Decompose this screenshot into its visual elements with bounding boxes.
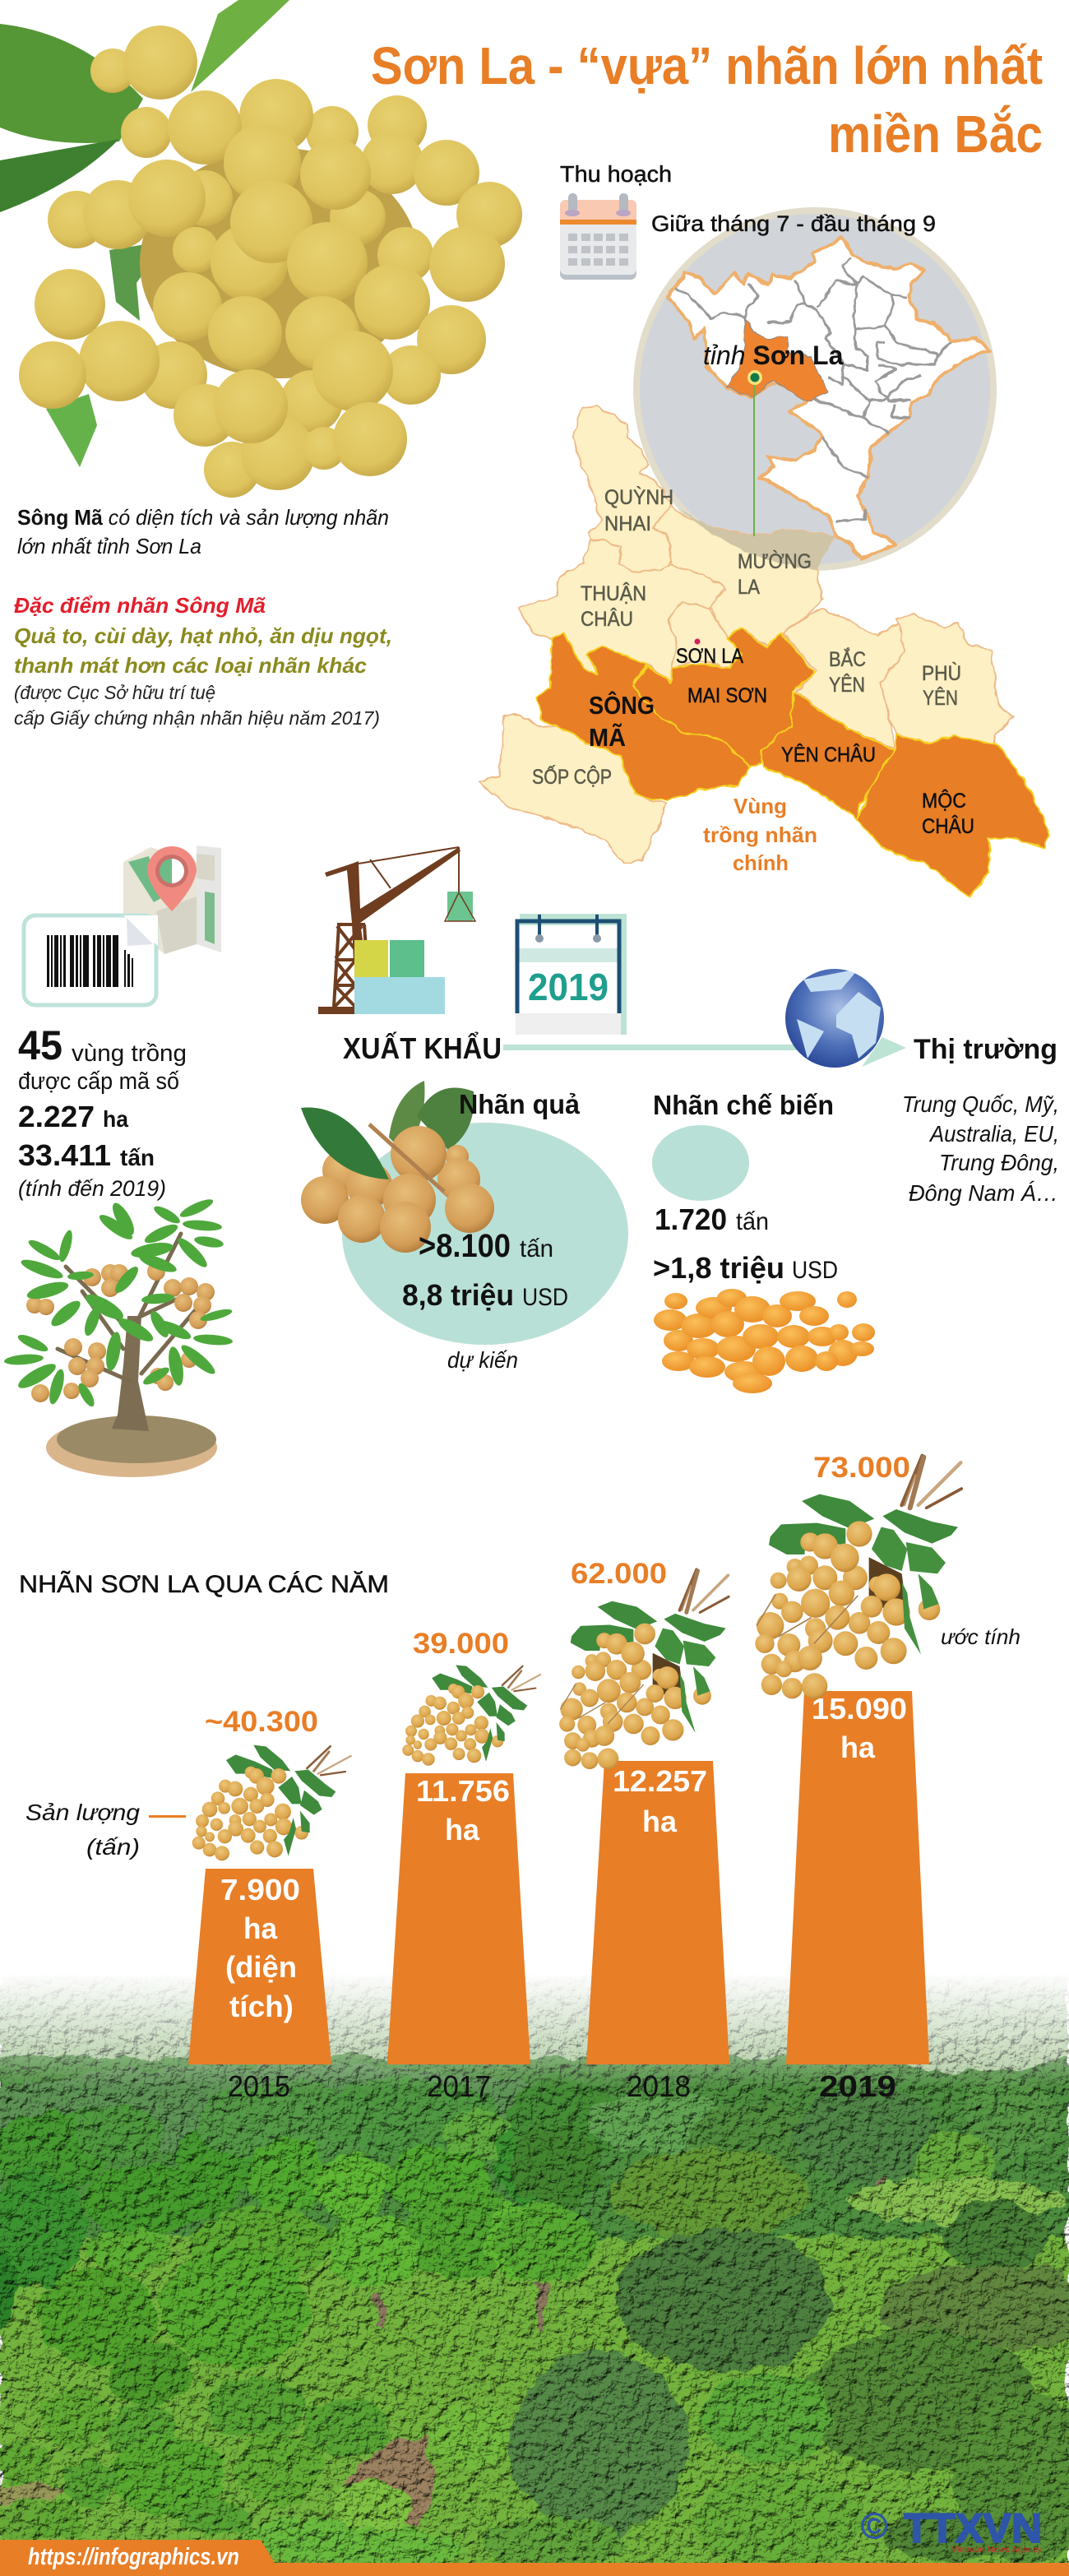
harvest period: Giữa tháng 7 - đầu tháng 9 xyxy=(651,211,936,236)
label: main growing area xyxy=(703,794,817,875)
text: growing areas: (tính đến 2019) xyxy=(18,1176,166,1201)
district: Mai Sơn xyxy=(633,628,815,767)
legend: output in tonnes: Sản lượng xyxy=(25,1800,140,1825)
label: tỉnh Sơn La: tỉnh Sơn La xyxy=(703,341,844,370)
year labels: 2019 xyxy=(819,2069,896,2103)
map labels: MƯỜNG xyxy=(738,549,812,573)
district: Thuận Châu xyxy=(519,540,724,683)
photo: longan bunch xyxy=(0,0,522,498)
icon: longan tree xyxy=(4,1196,234,1477)
text: markets list xyxy=(902,1091,1059,1206)
icon: bunch 2019 xyxy=(755,1456,961,1699)
map labels: YÊN xyxy=(923,686,958,710)
icon: bunch 2018 xyxy=(559,1569,729,1769)
district: Sốp Cộp xyxy=(479,715,666,863)
icon: port crane and containers xyxy=(318,847,475,1014)
map labels: MÃ xyxy=(589,723,626,752)
footer bar xyxy=(0,2540,1069,2576)
district: Quỳnh Nhai xyxy=(572,405,672,573)
note: estimated 2019: ước tính xyxy=(941,1624,1020,1649)
text: longan characteristics: cấp Giấy chứng nhận nhãn hiệu năm 2017) xyxy=(14,707,380,729)
text: growing areas: 33.411 xyxy=(18,1138,111,1172)
logo: TTXVN: Vietnam News Agency xyxy=(951,2546,1042,2555)
map labels: SÔNG xyxy=(589,690,655,720)
district: Mộc Châu xyxy=(857,734,1049,897)
label: main growing area: Vùng xyxy=(733,794,787,818)
text: growing areas: được cấp mã số xyxy=(18,1068,179,1095)
output values: 39.000 xyxy=(413,1628,509,1660)
label: market: Thị trường xyxy=(914,1034,1057,1065)
label: processed longan: Nhãn chế biến xyxy=(653,1090,834,1120)
icon: 2019 calendar xyxy=(516,914,627,1035)
map labels: CHÂU xyxy=(581,607,633,631)
district: Phù Yên xyxy=(881,614,1013,744)
overlap of locator circle xyxy=(677,507,835,569)
map labels: THUẬN xyxy=(581,581,646,605)
note: estimated: dự kiến xyxy=(447,1347,518,1373)
figures: fresh longan xyxy=(402,1228,568,1312)
figures: processed longan: >1,8 triệu xyxy=(653,1251,784,1285)
text: growing areas: tấn xyxy=(120,1145,155,1170)
photo: dried longan xyxy=(654,1289,875,1393)
output values: 62.000 xyxy=(571,1558,667,1590)
bar: 2017: 11.756 xyxy=(416,1774,510,1808)
text: longan characteristics xyxy=(14,593,392,729)
label: export: XUẤT KHẨU xyxy=(343,1031,502,1065)
bar: 2015 xyxy=(188,1869,331,2064)
calendar year: 2019 xyxy=(528,966,609,1008)
connector: locator to district map xyxy=(747,370,762,536)
bar: 2019 xyxy=(786,1691,929,2064)
legend: output in tonnes: (tấn) xyxy=(86,1834,140,1860)
bar: 2019: 15.090 xyxy=(812,1692,907,1726)
label: main growing area: trồng nhãn xyxy=(703,822,817,847)
figures: processed longan xyxy=(653,1202,838,1285)
figures: processed longan: 1.720 xyxy=(655,1202,727,1236)
title: miền Bắc xyxy=(828,104,1043,164)
icon: bunch 2015 xyxy=(192,1745,351,1860)
figures: processed longan: USD xyxy=(792,1257,838,1284)
logo: TTXVN xyxy=(861,2505,1042,2555)
text: markets list: Đông Nam Á… xyxy=(909,1180,1058,1206)
map labels: YÊN CHÂU xyxy=(781,743,876,767)
bar: 2017: ha xyxy=(445,1813,480,1846)
output values: ~40.300 xyxy=(205,1706,318,1738)
icon: bunch 2017 xyxy=(402,1665,540,1766)
map labels: NHAI xyxy=(604,512,651,535)
bar: 2015: 7.900 xyxy=(220,1873,300,1907)
bar: 2019: ha xyxy=(840,1730,876,1764)
figures: processed longan: tấn xyxy=(736,1208,769,1235)
arrow: export to market xyxy=(503,1037,906,1067)
year labels: 2017 xyxy=(427,2069,491,2103)
map labels: PHÙ xyxy=(922,661,961,685)
map labels: SỐP CỘP xyxy=(532,764,612,789)
district: Sông Mã xyxy=(538,632,751,801)
legend: output in tonnes xyxy=(25,1800,186,1860)
figures: fresh longan: >8.100 xyxy=(419,1228,511,1264)
figures: fresh longan: tấn xyxy=(520,1235,553,1263)
text: growing areas: vùng trồng xyxy=(72,1040,187,1067)
district: Sơn La city xyxy=(668,603,741,668)
icon: folded map with pin xyxy=(123,846,221,954)
map: northern Vietnam locator xyxy=(636,211,993,568)
bar: 2015: tích) xyxy=(229,1990,294,2023)
caption: Sông Mã: Sông Mã có diện tích và sản lượng nhãn xyxy=(17,505,389,530)
figures: fresh longan: 8,8 triệu xyxy=(402,1278,514,1312)
text: markets list: Australia, EU, xyxy=(928,1121,1059,1147)
logo: TTXVN: © xyxy=(861,2506,887,2546)
bar: 2018: 12.257 xyxy=(613,1764,707,1798)
text: longan characteristics: Đặc điểm nhãn Sông Mã xyxy=(14,593,266,618)
map labels: LA xyxy=(738,576,760,599)
map labels: SƠN LA xyxy=(676,645,743,668)
map labels xyxy=(532,485,974,838)
year labels xyxy=(228,2069,896,2103)
text: growing areas: ha xyxy=(103,1106,128,1132)
label: main growing area: chính xyxy=(733,850,789,875)
output values: 73.000 xyxy=(813,1452,910,1484)
photo: fresh longan fruit xyxy=(301,1081,494,1253)
icon: globe xyxy=(785,969,884,1068)
bubble: processed longan xyxy=(652,1125,749,1201)
text: markets list: Trung Đông, xyxy=(939,1150,1059,1175)
bar: 2018: ha xyxy=(642,1805,678,1838)
text: longan characteristics: Quả to, cùi dày, hạt nhỏ, ăn dịu ngọt, xyxy=(14,623,392,648)
photo: longan orchard xyxy=(0,1957,1069,2576)
bar: 2015: (diện xyxy=(225,1950,297,1984)
icon: calendar xyxy=(560,193,636,280)
year labels: 2015 xyxy=(228,2069,290,2103)
district: Yên Châu xyxy=(761,693,895,819)
bar: 2017 xyxy=(387,1773,530,2064)
figures: fresh longan: USD xyxy=(522,1284,568,1311)
label: fresh longan: Nhãn quả xyxy=(459,1089,581,1119)
district: Bắc Yên xyxy=(784,608,905,749)
text: longan characteristics: (được Cục Sở hữu trí tuệ xyxy=(14,682,215,703)
text: markets list: Trung Quốc, Mỹ, xyxy=(902,1091,1059,1117)
caption: Sông Mã xyxy=(17,505,389,558)
map labels: MAI SƠN xyxy=(687,684,767,707)
year labels: 2018 xyxy=(627,2069,691,2103)
map labels: BẮC xyxy=(829,646,866,671)
text: growing areas: 2.227 xyxy=(18,1100,95,1133)
caption: Sông Mã: lớn nhất tỉnh Sơn La xyxy=(17,534,201,558)
logo: TTXVN: TTXVN xyxy=(904,2505,1042,2551)
map: Sơn La districts xyxy=(479,405,1049,897)
map labels: QUỲNH xyxy=(604,485,673,509)
icon: barcode xyxy=(24,915,158,1005)
footer bar: https://infographics.vn xyxy=(28,2544,239,2570)
bubble: fresh longan xyxy=(342,1123,628,1345)
harvest label: Thu hoạch xyxy=(560,161,672,187)
title xyxy=(371,36,1043,164)
district: Mường La xyxy=(653,505,835,648)
bar: 2018 xyxy=(586,1761,729,2064)
bar: 2015: ha xyxy=(243,1911,278,1945)
mist fade over orchard xyxy=(0,1933,1069,2089)
map labels: MỘC xyxy=(922,789,966,813)
map labels: YÊN xyxy=(829,673,865,697)
text: growing areas xyxy=(18,1022,187,1201)
map labels: CHÂU xyxy=(922,814,974,838)
text: growing areas: 45 xyxy=(18,1022,62,1068)
text: longan characteristics: thanh mát hơn các loại nhãn khác xyxy=(14,653,368,678)
section heading: NHÃN SƠN LA QUA CÁC NĂM xyxy=(19,1570,389,1598)
output values xyxy=(205,1452,910,1738)
